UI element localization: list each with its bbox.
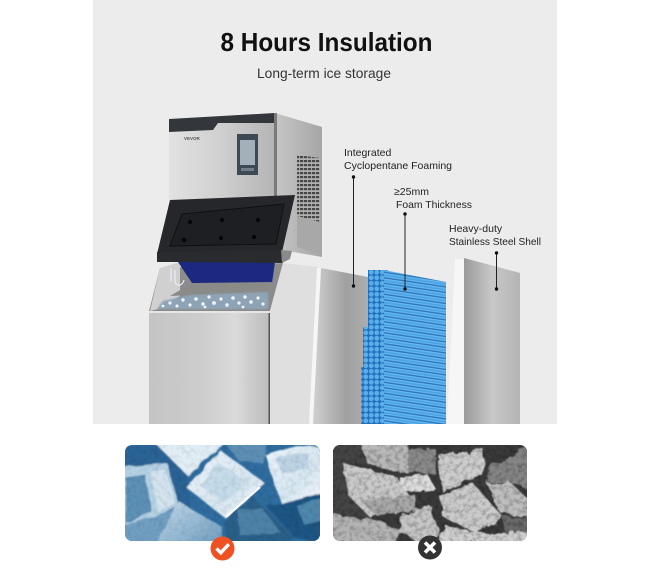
- ice bin interior: [149, 262, 283, 311]
- callout: steel shell: Stainless Steel Shell: [449, 236, 541, 248]
- left stainless panel: [309, 268, 368, 424]
- machine head side with vent: [275, 113, 322, 257]
- right stainless shell: [447, 258, 520, 424]
- bin front panel: [149, 311, 270, 424]
- bin side panel: [270, 263, 318, 424]
- callout: cyclopentane foaming: Cyclopentane Foaming: [344, 160, 452, 172]
- title: 8 Hours Insulation: [220, 27, 432, 57]
- subtitle: Long-term ice storage: [257, 65, 391, 81]
- callout: cyclopentane foaming: Integrated: [344, 147, 391, 159]
- callout: foam thickness: Foam Thickness: [396, 199, 472, 211]
- icon: dark cross: [418, 536, 442, 560]
- machine head front: VEVOR: [184, 136, 201, 141]
- callout: steel shell: Heavy-duty: [449, 223, 503, 235]
- ice machine: [149, 113, 322, 424]
- open door: [157, 195, 295, 263]
- blue foam layer: [361, 270, 446, 424]
- machine head front: [169, 113, 277, 201]
- icon: orange check: [210, 536, 234, 560]
- callout: foam thickness: [394, 186, 472, 291]
- infographic canvas: [93, 0, 557, 560]
- grey background panel: [93, 0, 557, 424]
- callout: steel shell: [449, 223, 541, 291]
- callout: foam thickness: ≥25mm: [394, 186, 429, 198]
- photo: cloudy crushed ice: [331, 443, 529, 543]
- photo: clear ice cubes: [123, 443, 322, 543]
- callout: cyclopentane foaming: [344, 147, 452, 288]
- control display: [237, 134, 258, 175]
